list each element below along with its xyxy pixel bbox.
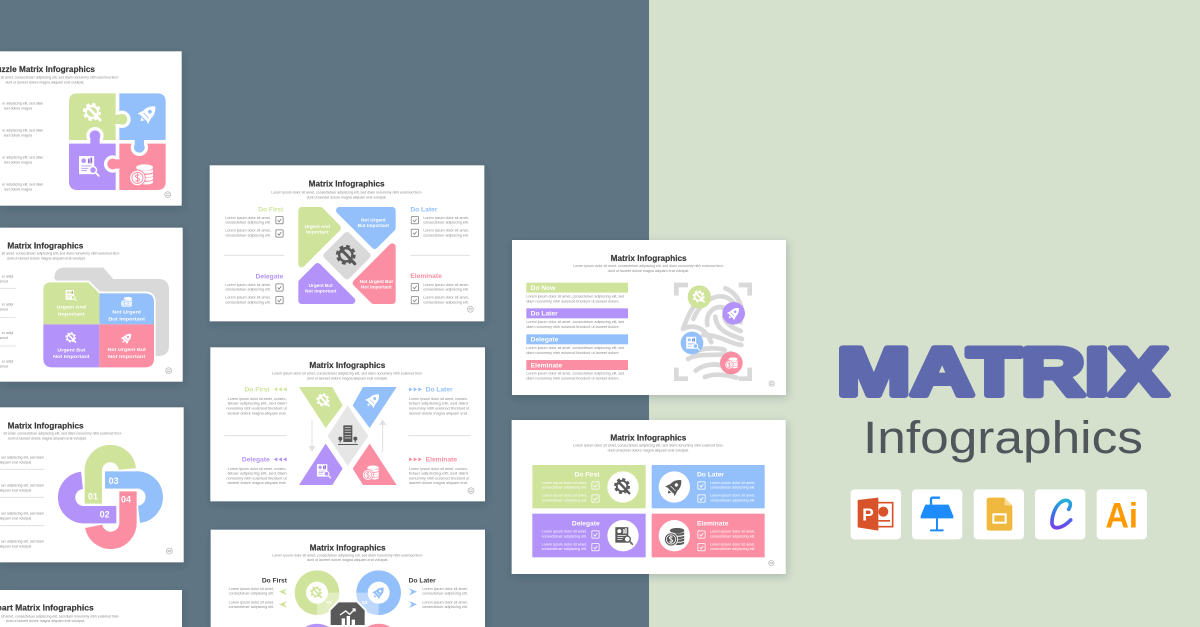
background: slate panel <box>0 0 649 627</box>
text block: eleminate <box>410 273 469 304</box>
knot numbers <box>88 476 131 520</box>
text block: delegate: laoreet dolore magna aliquam erat. <box>228 481 287 485</box>
list item: delegate <box>526 334 628 355</box>
text block: puzzle list: reet dolore magna <box>4 107 32 111</box>
text block: knot list: uer adipiscing elit, sed diam <box>1 540 44 544</box>
text block: puzzle list: er adipiscing elit, sed diam <box>2 182 43 186</box>
quadrant labels: Not Important <box>53 354 90 359</box>
card: do first: consectetuer adipiscing elit. <box>542 498 587 502</box>
text block: puzzle list: er adipiscing elit, sed diam <box>2 102 43 106</box>
subtitle: Lorem ipsum dolor sit amet, consectetuer adipiscing elit, sed diam nonummy nibh euismod tinci- <box>272 371 423 375</box>
heading: folder matrix: Matrix Infographics <box>7 240 84 250</box>
text block: delegate: Delegate <box>242 457 270 464</box>
card: eleminate: Lorem ipsum dolor sit amet, <box>710 530 755 534</box>
icon: PowerPoint: P <box>862 505 874 525</box>
text block: eleminate: consectetuer adipiscing elit. <box>423 300 469 304</box>
text block: eleminate: Eleminate <box>426 457 457 464</box>
badge: rocket <box>722 302 745 325</box>
icon: rocket <box>363 390 383 410</box>
text block: knot list <box>0 456 44 549</box>
text block: do first: Do First <box>258 206 284 213</box>
list item: do later: Lorem ipsum dolor sit amet, consectetuer adipiscing elit, sed <box>526 320 624 324</box>
subtitle: Lorem ipsum dolor sit amet, consectetuer adipiscing elit, sed diam nonummy nibh euismod tinci- <box>272 553 423 557</box>
text block: puzzle list: reet dolore magna <box>4 187 32 191</box>
text block: do later: consectetuer adipiscing elit. <box>422 605 468 609</box>
text block: do first <box>226 387 287 415</box>
card: do later: Do Later <box>697 472 724 479</box>
text block: delegate <box>225 273 284 304</box>
text block: knot list: uer adipiscing elit, sed diam <box>1 484 44 488</box>
card: delegate: Lorem ipsum dolor sit amet, <box>542 542 587 546</box>
text block: do first: nonummy nibh euismod tincidunt ut <box>226 406 287 410</box>
text block: do first: Lorem ipsum dolor sit amet, <box>229 587 274 591</box>
heading: Matrix Infographics <box>309 360 386 370</box>
quadrant labels <box>305 218 394 293</box>
text block: delegate: Delegate <box>256 273 284 280</box>
list item: eleminate: diam nonummy nibh euismod tincidunt ut laoreet dolore. <box>526 377 620 381</box>
blue ring: 03 <box>362 600 368 606</box>
icon: gear <box>317 394 329 406</box>
logo mark <box>468 488 474 494</box>
card: do first: Do First <box>575 472 600 479</box>
subtitle: folder slide: sit amet, consectetuer adipiscing elit, sed diam nonummy nibh euismod tinci- <box>2 252 120 256</box>
panel: fingerprint matrix slide <box>512 240 786 395</box>
text block: eleminate: Lorem ipsum dolor sit amet, <box>423 283 469 287</box>
text block: do later: Lorem ipsum dolor sit amet, consec- <box>409 397 468 401</box>
list item: eleminate <box>526 360 628 381</box>
subtitle: heart slide <box>1 614 119 623</box>
icon: Illustrator <box>1097 489 1147 539</box>
list item: do now: Lorem ipsum dolor sit amet, consectetuer adipiscing elit, sed <box>526 294 624 298</box>
logo mark <box>166 548 172 554</box>
text block: delegate: Lorem ipsum dolor sit amet, <box>225 296 271 300</box>
subtitle: folder slide: dunt ut laoreet dolore magna aliquam erat volutpat. <box>7 256 86 260</box>
knot numbers: 02 <box>100 510 110 520</box>
list item: do now <box>526 283 628 303</box>
quadrant labels: Not Important <box>361 284 392 289</box>
panel: circle matrix slide <box>211 530 485 627</box>
text block: do first: Lorem ipsum dolor sit amet, <box>229 600 274 604</box>
fingerprint graphic <box>676 285 750 379</box>
background: sage panel <box>649 0 1200 627</box>
badge: coins <box>720 352 743 374</box>
text block: delegate <box>226 457 287 485</box>
text block: do first: Do First <box>262 577 288 584</box>
icon: coins <box>363 465 379 480</box>
text block: do first: laoreet dolore magna aliquam erat. <box>228 411 287 415</box>
text block: delegate: nonummy nibh euismod tincidunt ut <box>226 476 287 480</box>
logo mark <box>769 560 774 566</box>
list item: eleminate: Eleminate <box>531 362 562 369</box>
text block: delegate: Lorem ipsum dolor sit amet, consec- <box>228 467 287 471</box>
subtitle: heart slide: sit amet, consectetuer adipiscing elit, sed diam nonummy nibh euismod tinci- <box>1 614 119 618</box>
card: eleminate: consectetuer adipiscing elit. <box>710 547 755 551</box>
text block: knot list: uer adipiscing elit, sed diam <box>1 512 44 516</box>
card: eleminate: Lorem ipsum dolor sit amet, <box>710 542 755 546</box>
card: do later: Lorem ipsum dolor sit amet, <box>710 481 755 485</box>
puzzle chart <box>69 93 166 190</box>
subtitle: puzzle slide <box>1 76 119 84</box>
list item: do now: diam nonummy nibh euismod tincidunt ut laoreet dolore. <box>526 299 620 303</box>
green ring <box>295 570 339 615</box>
text block: puzzle list: er adipiscing elit, sed diam <box>2 129 43 133</box>
subtitle: Lorem ipsum dolor sit amet, consectetuer adipiscing elit, sed diam nonummy nibh euismod tinci- <box>573 444 724 448</box>
quadrant labels: Not Important <box>108 354 146 359</box>
quadrant labels: Urgent But <box>309 283 333 288</box>
subtitle <box>272 553 423 562</box>
subtitle: dunt ut laoreet dolore magna aliquam erat volutpat. <box>608 269 689 273</box>
quadrant labels <box>53 304 147 359</box>
arrow: up <box>380 420 385 452</box>
subtitle <box>573 444 724 453</box>
text block: do later <box>409 577 468 609</box>
purple ring <box>305 624 329 627</box>
text block: folder list: er adipi <box>2 303 14 307</box>
text block: eleminate: Eleminate <box>410 273 442 280</box>
card: do later <box>652 465 765 508</box>
text block: folder list <box>0 274 16 368</box>
icon: gear <box>337 246 355 264</box>
icon: report <box>66 290 76 301</box>
icon: rocket <box>119 331 134 346</box>
text block: eleminate: consectetuer adipiscing elit. <box>423 288 469 292</box>
text block: do first: consectetuer adipiscing elit. <box>225 233 271 237</box>
card: do later: Lorem ipsum dolor sit amet, <box>710 494 755 498</box>
panel: card grid matrix slide <box>512 420 786 574</box>
subtitle: Lorem ipsum dolor sit amet, consectetuer adipiscing elit, sed diam nonummy nibh euismod tinci- <box>271 190 422 194</box>
quadrant labels: Important <box>306 229 329 234</box>
panel: heart matrix slide <box>0 590 182 627</box>
icon: Illustrator: Ai <box>1105 496 1138 535</box>
card: delegate: consectetuer adipiscing elit. <box>542 534 587 538</box>
icon: Google Slides <box>974 489 1024 539</box>
text block: do first: tetuer adipiscing elit, sed diam <box>228 402 287 406</box>
pink ring <box>367 624 390 627</box>
subtitle: puzzle slide: sit amet, consectetuer adipiscing elit, sed diam nonummy nibh euismod tinci- <box>1 76 119 80</box>
icon: coins <box>121 297 132 307</box>
text block: do first <box>225 206 284 237</box>
quadrant labels: Urgent And <box>305 224 330 229</box>
text block: eleminate <box>409 457 469 485</box>
logo mark <box>769 381 774 386</box>
card: eleminate <box>652 514 765 557</box>
text block: delegate: consectetuer adipiscing elit. <box>225 300 271 304</box>
badge: report <box>681 332 703 354</box>
quadrant labels: Important <box>58 311 85 316</box>
text block: do later: consectetuer adipiscing elit. <box>423 233 469 237</box>
subtitle: knot slide <box>3 432 122 440</box>
card: do first <box>532 465 646 508</box>
subtitle: folder slide <box>2 252 120 260</box>
text block: do later: laoreet dolore magna aliquam erat. <box>409 411 468 415</box>
card: eleminate: consectetuer adipiscing elit. <box>710 534 755 538</box>
software icons row <box>851 489 1147 539</box>
text block: do first <box>229 577 288 609</box>
subtitle: dunt ut laoreet dolore magna aliquam erat volutpat. <box>307 195 387 199</box>
text block: puzzle list: reet dolore magna <box>4 161 32 165</box>
text block: do first: consectetuer adipiscing elit. <box>229 605 274 609</box>
panel: knot matrix slide <box>0 407 184 562</box>
quadrant labels: Not Urgent But <box>360 279 394 284</box>
logo mark <box>165 192 171 198</box>
subtitle <box>271 190 422 199</box>
knot numbers: 01 <box>88 491 98 501</box>
badge: gear <box>688 285 711 309</box>
quadrant labels: Urgent But <box>57 347 86 352</box>
heading: Matrix Infographics <box>310 543 386 553</box>
text block: folder list: er adipi <box>2 331 14 335</box>
card: do first: Lorem ipsum dolor sit amet, <box>542 494 587 498</box>
card: do first: Lorem ipsum dolor sit amet, <box>542 481 587 485</box>
text block: eleminate: Lorem ipsum dolor sit amet, <box>423 296 469 300</box>
icon: rocket <box>135 101 160 126</box>
subtitle <box>272 371 423 380</box>
text block: do later <box>410 206 469 237</box>
list item: delegate: diam nonummy nibh euismod tincidunt ut laoreet dolore. <box>526 351 620 355</box>
title: MATRIX: MATRIX <box>837 334 1168 410</box>
subtitle: dunt ut laoreet dolore magna aliquam erat volutpat. <box>307 558 388 562</box>
list item: do later: diam nonummy nibh euismod tincidunt ut laoreet dolore. <box>526 325 620 329</box>
heading: Matrix Infographics <box>611 253 687 263</box>
subtitle: knot slide: dunt ut laoreet dolore magna aliquam erat volutpat. <box>8 436 87 440</box>
text block: do first: Lorem ipsum dolor sit amet, <box>225 216 271 220</box>
text block: do first: consectetuer adipiscing elit. <box>225 221 271 225</box>
icon: report <box>317 464 331 478</box>
green ring: 01 <box>326 600 332 606</box>
quadrant labels: Not Urgent <box>361 218 386 223</box>
list item: do now: Do Now <box>531 285 556 292</box>
list item: delegate: Lorem ipsum dolor sit amet, consectetuer adipiscing elit, sed <box>526 346 624 350</box>
panel: folder matrix slide <box>0 228 183 382</box>
card: do later: consectetuer adipiscing elit. <box>710 486 755 490</box>
matrix shapes <box>302 210 392 301</box>
subtitle: dunt ut laoreet dolore magna aliquam erat volutpat. <box>307 376 388 380</box>
list item: eleminate: Lorem ipsum dolor sit amet, consectetuer adipiscing elit, sed <box>526 372 624 376</box>
text block: do first: consectetuer adipiscing elit. <box>229 592 274 596</box>
text block: eleminate: nonummy nibh euismod tincidunt ut <box>409 476 469 480</box>
blue ring <box>356 570 401 615</box>
logo mark <box>166 368 172 374</box>
quadrant labels: Urgent And <box>57 304 86 309</box>
list item: delegate: Delegate <box>531 337 559 344</box>
text block: do first: Lorem ipsum dolor sit amet, <box>225 229 271 233</box>
text block: do later: consectetuer adipiscing elit. <box>422 592 468 596</box>
subtitle <box>573 264 724 273</box>
chart hexagon <box>330 601 366 626</box>
text block: do later: consectetuer adipiscing elit. <box>423 221 469 225</box>
icon: Canva <box>1035 489 1085 539</box>
quadrant labels: Not Urgent But <box>107 347 147 352</box>
text block: do later: Do Later <box>410 206 438 213</box>
icon: gear <box>84 104 100 120</box>
text block: knot list: uer adipiscing elit, sed diam <box>1 456 44 460</box>
card: eleminate: Eleminate <box>697 520 729 527</box>
text block: puzzle list: reet dolore magna <box>4 134 32 138</box>
knot numbers: 04 <box>121 494 131 504</box>
card: do later: consectetuer adipiscing elit. <box>710 498 755 502</box>
text block: eleminate: laoreet dolore magna aliquam erat. <box>409 481 468 485</box>
text block: do later: tetuer adipiscing elit, sed diam <box>409 402 468 406</box>
text block: delegate: consectetuer adipiscing elit. <box>225 288 271 292</box>
text block: do later: Lorem ipsum dolor sit amet, <box>423 229 469 233</box>
icon: building <box>338 425 358 445</box>
subtitle: Infographics: Infographics <box>863 412 1143 463</box>
quadrant labels: But Important <box>358 223 390 228</box>
heading: Matrix Infographics <box>309 178 385 188</box>
logo mark <box>467 306 473 312</box>
arrow: down <box>309 420 315 451</box>
subtitle: knot slide: sit amet, consectetuer adipiscing elit, sed diam nonummy nibh euismod tinci- <box>3 432 122 436</box>
knot numbers: 03 <box>109 476 119 486</box>
folder chart <box>43 268 169 367</box>
text block: folder list: er adipi <box>2 274 14 278</box>
text block: do later: Do Later <box>409 577 436 584</box>
text block: do later: nonummy nibh euismod tincidunt ut <box>409 406 469 410</box>
text block: eleminate: Lorem ipsum dolor sit amet, consec- <box>409 467 468 471</box>
text block: do later <box>409 387 469 415</box>
text block: delegate: Lorem ipsum dolor sit amet, <box>225 283 271 287</box>
card: delegate <box>532 514 646 557</box>
icon: PowerPoint <box>851 489 901 539</box>
heading: knot matrix: Matrix Infographics <box>8 420 84 430</box>
heading: Matrix Infographics <box>610 433 687 443</box>
text block: puzzle list: er adipiscing elit, sed diam <box>2 156 43 160</box>
quadrant labels: Not Urgent <box>112 310 142 315</box>
icon: coins <box>130 164 153 186</box>
matrix shapes <box>299 387 397 485</box>
text block: do later: Lorem ipsum dolor sit amet, <box>422 600 468 604</box>
text block: folder list: er adipi <box>2 359 14 363</box>
subtitle: puzzle slide: dunt ut laoreet dolore magna aliquam erat volutpat. <box>5 80 84 84</box>
text block: do first: Do First <box>245 387 270 394</box>
text block: do first: Lorem ipsum dolor sit amet, consec- <box>228 397 287 401</box>
card: delegate: Delegate <box>572 520 600 527</box>
knot chart <box>67 454 154 540</box>
icon: report <box>79 156 99 176</box>
text block: puzzle list <box>2 102 43 191</box>
panel: puzzle matrix slide <box>0 51 182 206</box>
subtitle: dunt ut laoreet dolore magna aliquam erat volutpat. <box>608 449 689 453</box>
list item: do later: Do Later <box>531 311 558 318</box>
text block: do later: Lorem ipsum dolor sit amet, <box>423 216 469 220</box>
panel: arrow quadrant matrix slide <box>210 165 484 321</box>
card: delegate: Lorem ipsum dolor sit amet, <box>542 530 587 534</box>
card: delegate: consectetuer adipiscing elit. <box>542 547 587 551</box>
subtitle: Lorem ipsum dolor sit amet, consectetuer adipiscing elit, sed diam nonummy nibh euismod tinci- <box>573 264 724 268</box>
card: do first: consectetuer adipiscing elit. <box>542 486 587 490</box>
icon: gear <box>66 333 75 342</box>
text block: do later: Lorem ipsum dolor sit amet, <box>422 587 468 591</box>
quadrant labels: But Important <box>108 317 146 322</box>
subtitle: heart slide: dunt ut laoreet dolore magna aliquam erat volutpat. <box>6 619 85 623</box>
text block: delegate: tetuer adipiscing elit, sed diam <box>228 472 287 476</box>
quadrant labels: Not Important <box>305 288 337 293</box>
icon: Keynote <box>912 489 962 539</box>
list item: do later <box>526 308 628 329</box>
text block: eleminate: tetuer adipiscing elit, sed diam <box>409 472 468 476</box>
panel: triangle matrix slide <box>210 347 485 501</box>
text block: do later: Do Later <box>426 387 453 394</box>
